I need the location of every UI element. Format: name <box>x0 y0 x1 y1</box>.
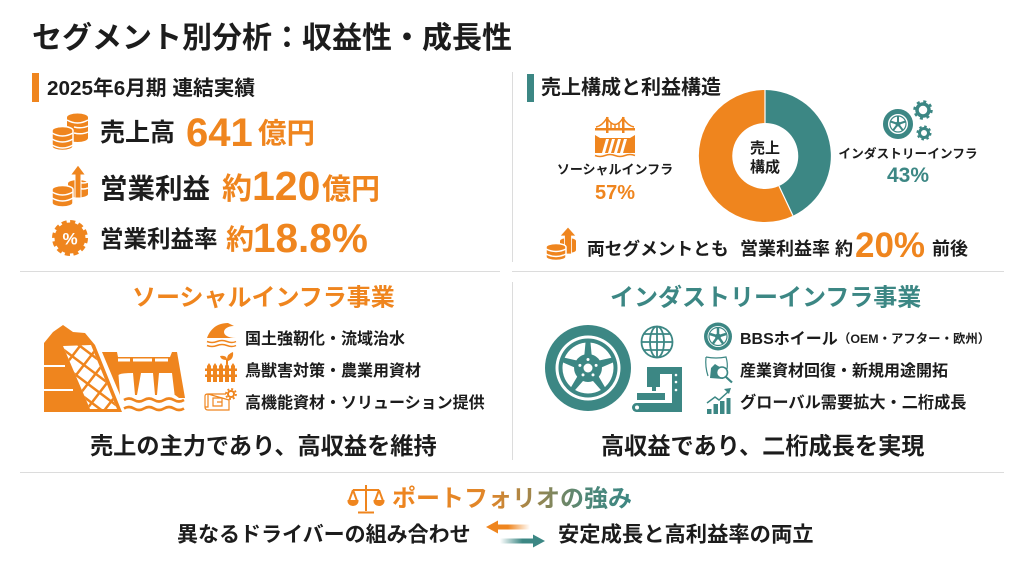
social infra share <box>557 162 673 204</box>
revenue row: 売上高 <box>100 119 175 147</box>
list item: BBS wheels <box>740 330 990 348</box>
icon: growth chart <box>707 388 731 414</box>
operating profit row: 約 <box>222 173 252 206</box>
icon: coins with arrow <box>546 227 576 260</box>
operating profit row: 営業利益 <box>100 173 210 204</box>
industry infra share: インダストリーインフラ <box>838 146 978 161</box>
icon: coins <box>52 114 88 150</box>
revenue row: 億円 <box>258 118 315 150</box>
margin summary: 両セグメントとも <box>587 238 729 259</box>
donut chart <box>699 90 831 222</box>
social infra summary: 売上の主力であり、高収益を維持 <box>90 433 437 459</box>
operating margin row: 営業利益率 <box>100 226 218 252</box>
heading: consolidated results: 2025年6月期 連結実績 <box>47 76 255 100</box>
icon: wave <box>207 323 236 346</box>
list item: BBS wheels: BBSホイール <box>740 330 838 348</box>
list item: BBS wheels: （OEM・アフター・欧州） <box>838 331 990 346</box>
icon: globe <box>642 326 672 358</box>
panel: social infrastructure <box>44 285 484 457</box>
heading: composition: 売上構成と利益構造 <box>541 75 721 99</box>
industry infra share: 43% <box>887 164 929 187</box>
icon: BBS wheel <box>704 322 732 350</box>
margin summary: 前後 <box>932 239 968 259</box>
icon: wheel and gears <box>886 102 932 140</box>
list item: materials: 高機能資材・ソリューション提供 <box>245 393 485 412</box>
icon: blueprint and gear <box>205 389 236 410</box>
social infra share: ソーシャルインフラ <box>557 162 673 177</box>
list item: industrial materials: 産業資材回復・新規用途開拓 <box>740 361 948 380</box>
margin summary: 約 <box>835 239 853 259</box>
donut chart: 構成 <box>750 158 780 176</box>
margin summary: 20% <box>855 226 925 265</box>
revenue row <box>100 111 315 155</box>
illustration: wheel <box>545 325 631 411</box>
illustration: mountain lattice and dam <box>44 325 185 412</box>
operating profit row: 120 <box>252 163 320 209</box>
operating margin row <box>100 215 368 261</box>
panel: portfolio strength <box>177 485 814 548</box>
icon: profit arrow <box>52 165 88 207</box>
heading: social infra business: ソーシャルインフラ事業 <box>132 284 395 312</box>
donut chart: 売上 <box>750 140 780 157</box>
panel: consolidated results <box>32 73 380 261</box>
icon: material and magnifier <box>706 357 732 382</box>
list item: wildlife: 鳥獣害対策・農業用資材 <box>245 361 421 380</box>
operating margin row: 約 <box>226 224 254 255</box>
industry infra summary: 高収益であり、二桁成長を実現 <box>601 433 924 459</box>
icon: percent badge: % <box>62 230 78 248</box>
arrows: exchange <box>486 520 545 548</box>
panel: sales composition <box>527 74 978 265</box>
social infra share: 57% <box>595 182 635 204</box>
icon: sewing machine <box>632 367 682 412</box>
panel: industry infrastructure <box>545 284 990 459</box>
title: セグメント別分析：収益性・成長性 <box>32 22 512 55</box>
heading: portfolio strength: ポートフォリオの強み <box>392 486 632 512</box>
industry infra share <box>838 146 978 187</box>
icon: percent badge <box>54 222 86 254</box>
list item: flood control: 国土強靭化・流域治水 <box>245 329 405 348</box>
margin summary <box>587 226 968 265</box>
icon: balance scale <box>348 485 384 512</box>
list item: global demand: グローバル需要拡大・二桁成長 <box>740 393 966 412</box>
text: stable growth: 安定成長と高利益率の両立 <box>558 522 814 546</box>
operating profit row <box>100 163 380 209</box>
operating profit row: 億円 <box>322 173 380 206</box>
margin summary: 営業利益率 <box>740 239 830 259</box>
revenue row: 641 <box>186 111 253 155</box>
heading: industry infra business: インダストリーインフラ事業 <box>610 284 921 312</box>
icon: fence and sprout <box>205 352 237 382</box>
text: different drivers: 異なるドライバーの組み合わせ <box>177 524 471 546</box>
operating margin row: 18.8% <box>253 215 368 261</box>
icon: bridge and dam <box>595 117 635 156</box>
